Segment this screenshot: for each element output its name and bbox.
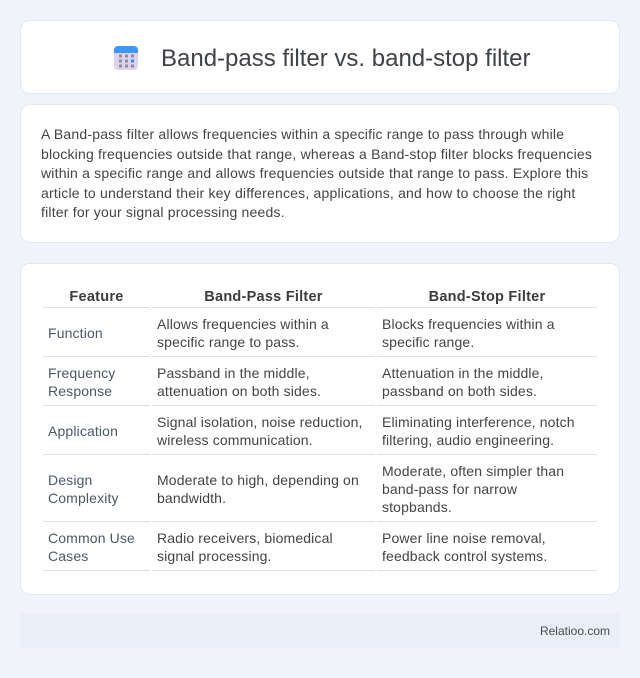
- text block: introduction: [41, 126, 592, 220]
- row: Application: [48, 414, 575, 448]
- text block: introduction: article to understand their key differences, applications, and how to choose the right: [41, 184, 575, 200]
- row: Frequency Response: attenuation on both sides.: [157, 383, 321, 399]
- text block: introduction: blocking frequencies outside that range, whereas a Band-stop filter blocks frequencies: [41, 146, 592, 162]
- row: Common Use Cases: Common Use: [48, 530, 135, 546]
- row: Design Complexity: band-pass for narrow: [382, 481, 517, 497]
- text block: introduction: filter for your signal processing needs.: [41, 204, 285, 220]
- row: Design Complexity: stopbands.: [382, 499, 452, 515]
- row: Function: specific range.: [382, 334, 474, 350]
- row: Application: filtering, audio engineering.: [382, 432, 554, 448]
- comparison table: [43, 289, 597, 571]
- row: Function: Blocks frequencies within a: [382, 316, 555, 332]
- row: Common Use Cases: signal processing.: [157, 548, 272, 564]
- row: Frequency Response: Passband in the middle,: [157, 365, 310, 381]
- row: Common Use Cases: Power line noise removal,: [382, 530, 546, 546]
- row: Frequency Response: Frequency: [48, 365, 115, 381]
- header: Band-Pass Filter: Band-Pass Filter: [204, 289, 323, 305]
- row: Application: Signal isolation, noise reduction,: [157, 414, 363, 430]
- row: Design Complexity: bandwidth.: [157, 490, 226, 506]
- header: Feature: Feature: [69, 289, 124, 305]
- row: Application: wireless communication.: [157, 432, 313, 448]
- row: Application: Application: [48, 423, 118, 439]
- row: Common Use Cases: Cases: [48, 548, 88, 564]
- row: Common Use Cases: feedback control systems.: [382, 548, 547, 564]
- footer bar: [20, 614, 620, 648]
- row: Design Complexity: Moderate to high, depending on: [157, 472, 359, 488]
- panel: title card: [20, 20, 620, 94]
- row: Function: [48, 316, 555, 350]
- row: Frequency Response: Attenuation in the middle,: [382, 365, 544, 381]
- row: Frequency Response: Response: [48, 383, 112, 399]
- row: Design Complexity: Moderate, often simpler than: [382, 463, 564, 479]
- text block: introduction: A Band-pass filter allows frequencies within a specific range to pass through while: [41, 126, 564, 142]
- row: Common Use Cases: [48, 530, 547, 564]
- row: Common Use Cases: Radio receivers, biomedical: [157, 530, 333, 546]
- header: Band-Stop Filter: Band-Stop Filter: [429, 289, 545, 305]
- row: Design Complexity: Complexity: [48, 490, 119, 506]
- row: Function: specific range to pass.: [157, 334, 300, 350]
- row: Function: Allows frequencies within a: [157, 316, 329, 332]
- row: Design Complexity: [48, 463, 564, 515]
- panel: introduction: [20, 104, 620, 243]
- row: Frequency Response: [48, 365, 544, 399]
- row: Design Complexity: Design: [48, 472, 92, 488]
- row: Function: Function: [48, 325, 103, 341]
- panel: comparison table: [20, 263, 620, 595]
- footer text: Relatioo.com: [540, 624, 610, 638]
- icon: calendar: [114, 46, 138, 70]
- row: Frequency Response: passband on both sides.: [382, 383, 537, 399]
- title: Band-pass filter vs. band-stop filter: [161, 45, 531, 72]
- row: Application: Eliminating interference, notch: [382, 414, 575, 430]
- text block: introduction: within a specific range and allows frequencies outside that range to pass. Explore this: [41, 165, 588, 181]
